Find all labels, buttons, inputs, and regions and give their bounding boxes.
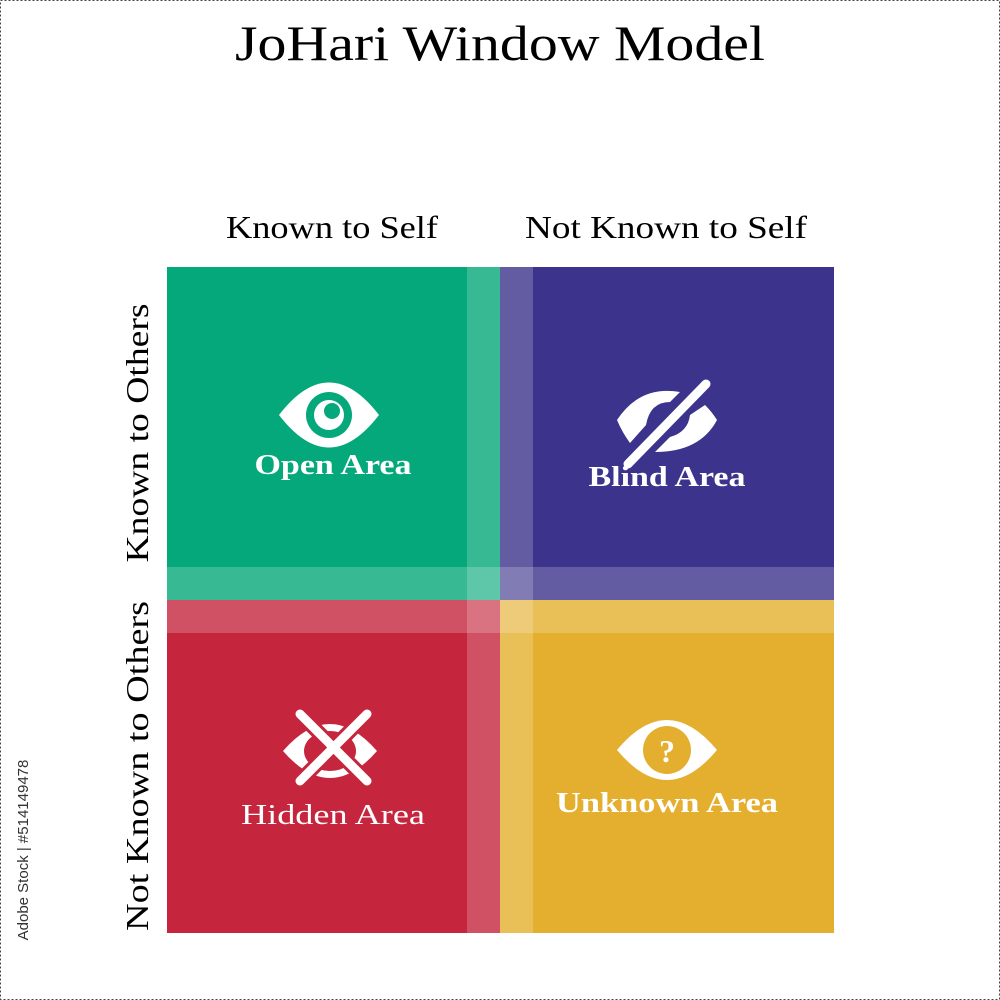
row header: not known to others: Not Known to Others xyxy=(119,601,155,931)
icon: open eye xyxy=(279,382,379,448)
label: hidden area: Hidden Area xyxy=(241,800,426,831)
side credit: Adobe Stock | #514149478 xyxy=(15,760,32,940)
label: blind area: Blind Area xyxy=(588,462,746,493)
row header: known to others: Known to Others xyxy=(119,304,155,562)
title: JoHari Window Model xyxy=(235,15,765,71)
column header: not known to self: Not Known to Self xyxy=(525,209,807,245)
column header: known to self: Known to Self xyxy=(226,209,438,245)
label: open area: Open Area xyxy=(254,450,412,481)
panel: open area xyxy=(167,267,500,600)
icon: crossed eye xyxy=(617,384,717,464)
icon: eye with question mark: ? xyxy=(659,733,675,769)
panel: blind area xyxy=(500,267,834,600)
icon: eye with question mark xyxy=(617,720,717,780)
label: unknown area: Unknown Area xyxy=(556,788,778,819)
panel: hidden area xyxy=(167,600,500,933)
icon: eye with X xyxy=(283,714,377,781)
panel: unknown area xyxy=(500,600,834,933)
